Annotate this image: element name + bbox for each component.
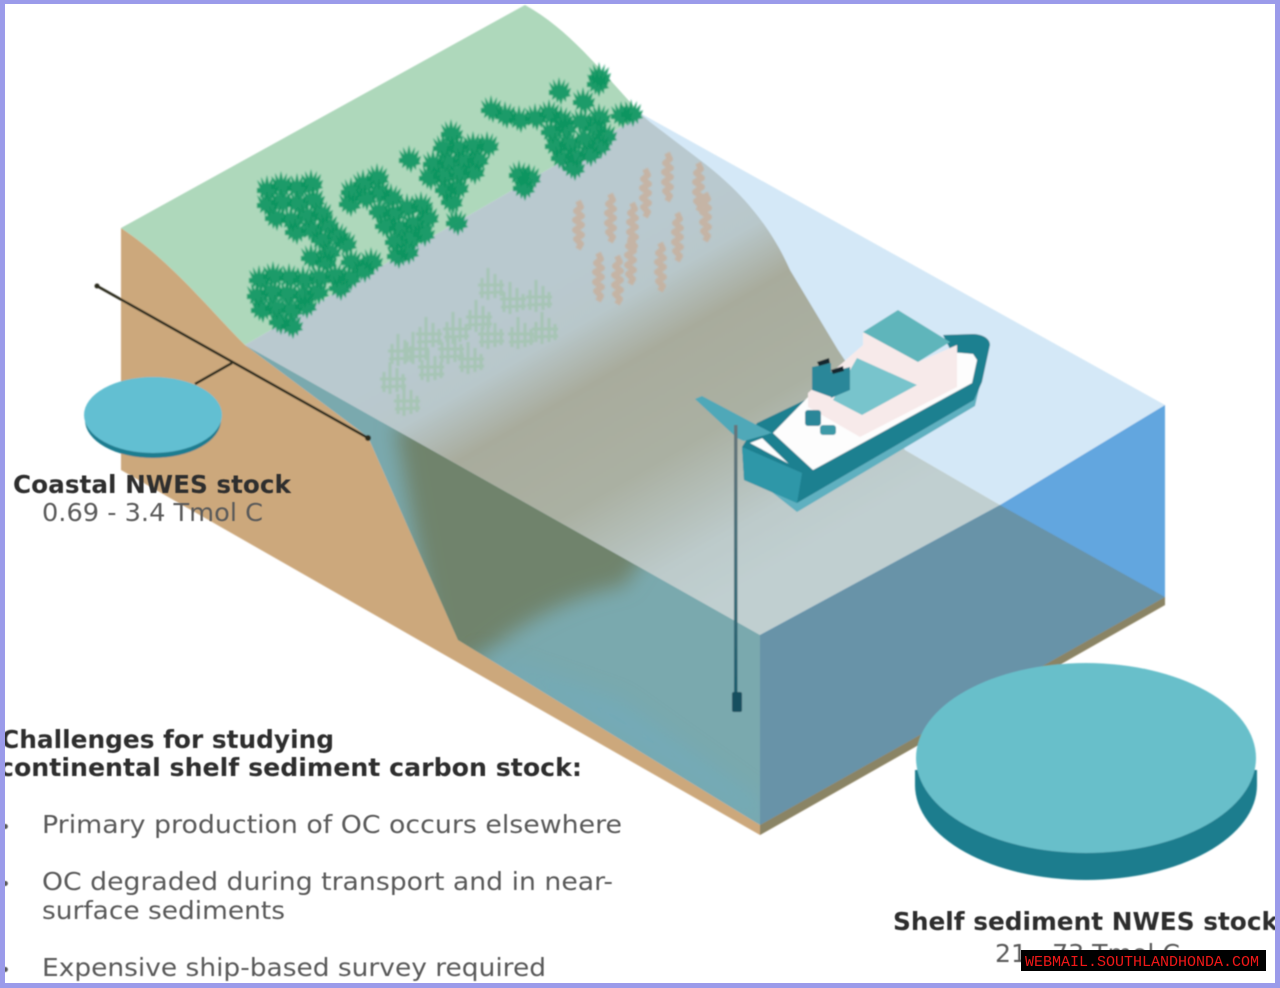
pale green seagrass: [380, 268, 558, 416]
right water face: [760, 405, 1165, 825]
front water face: [245, 345, 760, 825]
hull: [742, 334, 990, 503]
seagrass dark green clusters: [247, 62, 643, 339]
land cross-section: [121, 228, 1165, 835]
research vessel: [695, 310, 990, 512]
coastal stock label: 0.69 - 3.4 Tmol C: [42, 498, 263, 527]
challenges heading: continental shelf sediment carbon stock:: [0, 753, 582, 782]
shelf stock label: [893, 907, 1279, 968]
challenges list: •: [0, 817, 11, 838]
hull shadow: [744, 385, 980, 512]
seabed edge strip: [760, 597, 1165, 835]
right face seabed shading: [760, 505, 1165, 825]
challenges heading: Challenges for studying: [1, 725, 334, 754]
coastal stock label: Coastal NWES stock: [13, 470, 292, 499]
coastal stock disc: [84, 377, 222, 458]
sediment corer: [732, 692, 742, 712]
superstructure: [808, 332, 957, 437]
teal deck panel: [833, 358, 917, 415]
challenges list: OC degraded during transport and in near-: [42, 867, 613, 896]
water surface over open shelf: [640, 113, 1165, 505]
coastal land surface: [121, 5, 642, 345]
coastal stock pointer line: [94, 284, 371, 441]
shelf stock label: Shelf sediment NWES stock: [893, 907, 1279, 936]
coastal stock label: [13, 470, 292, 527]
challenges list: Primary production of OC occurs elsewhere: [42, 810, 622, 839]
deck canisters: [805, 410, 821, 426]
funnels: [812, 363, 831, 397]
challenges list: surface sediments: [42, 896, 285, 925]
sampling cable: [734, 425, 738, 695]
challenges list: •: [0, 874, 11, 895]
deck: [773, 352, 977, 470]
challenges list: Expensive ship-based survey required: [42, 953, 546, 982]
stern face: [742, 447, 802, 503]
dark slope through water: [387, 427, 652, 741]
shelf stock label: 21 - 73 Tmol C: [995, 939, 1180, 968]
wheelhouse roof: [863, 310, 950, 362]
challenges list: [0, 810, 622, 982]
crane arm: [695, 396, 772, 441]
tan kelp fronds: [575, 153, 709, 304]
challenges heading: [0, 725, 582, 782]
shelf sediment stock disc: [915, 663, 1257, 880]
challenges list: •: [0, 960, 11, 981]
seabed slope: [245, 115, 1000, 635]
watermark badge: WEBMAIL.SOUTHLANDHONDA.COM: [1025, 954, 1259, 971]
